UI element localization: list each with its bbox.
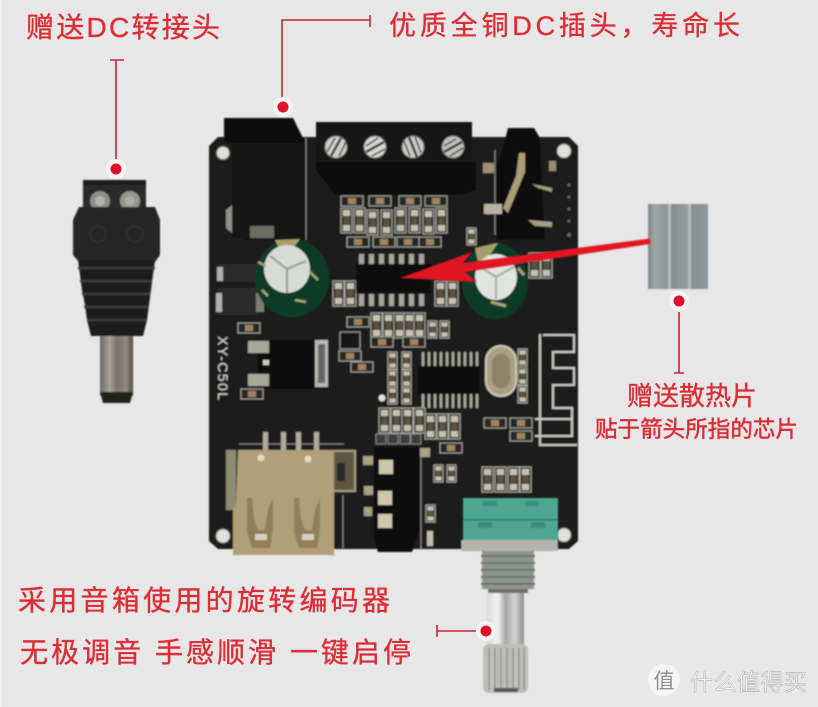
- callout: rotary encoder: [18, 585, 496, 668]
- marker dot: [273, 97, 293, 117]
- heat sink: [648, 204, 708, 289]
- mosfets: [216, 264, 264, 315]
- SMD components middle: [238, 313, 532, 546]
- voltage regulator: [241, 340, 328, 399]
- heading: 赠送散热片: [627, 381, 757, 411]
- electrolytic capacitor right: [462, 243, 528, 319]
- model marking: XY-C50L: [215, 336, 231, 400]
- SMD components upper: [333, 196, 552, 306]
- metal barrel: [100, 336, 133, 396]
- DC jack: [224, 118, 305, 240]
- USB port: [226, 432, 355, 556]
- rotary encoder: [461, 498, 558, 693]
- leader line: [437, 625, 476, 637]
- mounting holes: [216, 144, 571, 543]
- watermark text: 什么值得买: [690, 669, 807, 695]
- knurled knob: [483, 644, 528, 693]
- DC adapter connector: [73, 180, 160, 403]
- screw terminal block: [316, 122, 476, 195]
- PCB body: [209, 137, 578, 549]
- callout: DC adapter: [26, 12, 220, 179]
- electrolytic capacitor left: [255, 239, 329, 317]
- leader line: [674, 312, 684, 373]
- watermark: [648, 664, 807, 696]
- Bluetooth chip: [418, 352, 480, 408]
- terminal top: [83, 180, 146, 216]
- callout: DC plug: [273, 11, 740, 117]
- heading: 赠送DC转接头: [26, 12, 220, 43]
- heading: 优质全铜DC插头，寿命长: [389, 11, 740, 41]
- subheading: 贴于箭头所指的芯片: [595, 417, 798, 442]
- encoder body: [463, 498, 558, 542]
- text line 2: 无极调音 手感顺滑 一键启停: [20, 637, 411, 668]
- marker dot: [669, 291, 689, 311]
- leader line: [282, 15, 370, 102]
- encoder base: [461, 540, 558, 551]
- screws: [90, 191, 110, 211]
- antenna traces: [535, 334, 577, 445]
- leader line: [110, 60, 124, 165]
- crystal oscillator: [486, 346, 516, 396]
- red arrow pointing at chip: [400, 238, 650, 282]
- logo: 值: [654, 670, 674, 693]
- marker dot: [106, 159, 126, 179]
- callout: heat sink: [595, 291, 798, 442]
- 3.5mm socket: [363, 434, 430, 552]
- board: audio amplifier PCB: [209, 118, 578, 556]
- thread: [482, 551, 534, 589]
- headphone jack: [483, 128, 556, 240]
- amplifier chip: [356, 254, 431, 306]
- logo: [648, 664, 680, 696]
- shaft: [487, 593, 524, 645]
- marker dot: [476, 621, 496, 641]
- edge pads: [567, 184, 571, 237]
- text line 1: 采用音箱使用的旋转编码器: [18, 585, 390, 616]
- silkscreen lines: [239, 138, 495, 550]
- housing: [73, 207, 160, 262]
- strain relief ribs: [78, 260, 155, 336]
